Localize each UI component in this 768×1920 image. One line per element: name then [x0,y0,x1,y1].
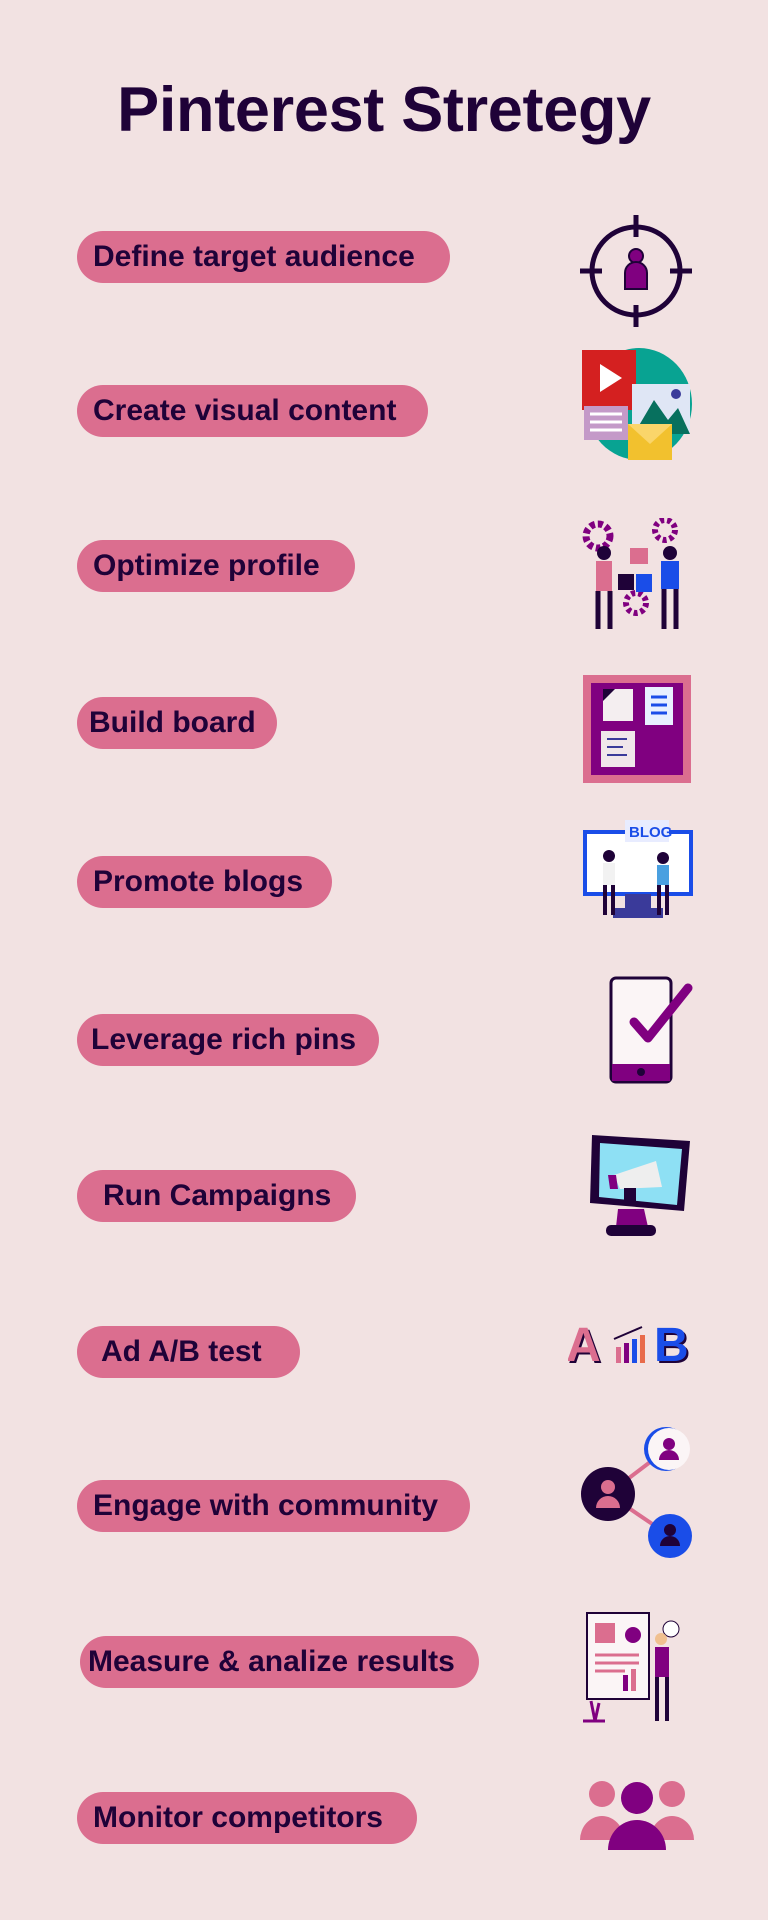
title: Pinterest Stretegy [117,75,651,145]
pill: run campaigns: Run Campaigns [103,1179,331,1212]
pill: measure & analize results: Measure & analize results [88,1645,455,1678]
pill: engage with community [77,1480,470,1532]
pill: run campaigns [77,1170,356,1222]
pill: engage with community: Engage with community [93,1489,438,1522]
icon: visual content [582,348,692,460]
icon: analytics [583,1612,680,1722]
pill: measure & analize results [80,1636,479,1688]
pill: optimize profile [77,540,355,592]
pill: leverage rich pins [77,1014,379,1066]
pill: ad a/b test: Ad A/B test [101,1335,262,1368]
icon: blog [583,820,693,918]
icon: campaign monitor [590,1135,690,1236]
pill: monitor competitors: Monitor competitors [93,1801,383,1834]
icon: board [583,675,691,783]
icon: rich pins phone [610,976,692,1084]
icon: A/B test [568,1321,691,1366]
pill: create visual content: Create visual content [93,394,396,427]
pill: optimize profile: Optimize profile [93,549,320,582]
icon: competitors group [580,1781,694,1850]
pill: build board: Build board [89,706,256,739]
icon: community network [581,1427,692,1558]
pill: monitor competitors [77,1792,417,1844]
pill: leverage rich pins: Leverage rich pins [91,1023,356,1056]
icon: blog: BLOG [629,824,672,841]
pill: promote blogs [77,856,332,908]
pill: create visual content [77,385,428,437]
pill: define target audience: Define target audience [93,240,415,273]
icon: target audience [580,215,692,327]
pill: define target audience [77,231,450,283]
pill: promote blogs: Promote blogs [93,865,303,898]
pill: build board [77,697,277,749]
icon: optimize profile [582,518,679,629]
pill: ad a/b test [77,1326,300,1378]
